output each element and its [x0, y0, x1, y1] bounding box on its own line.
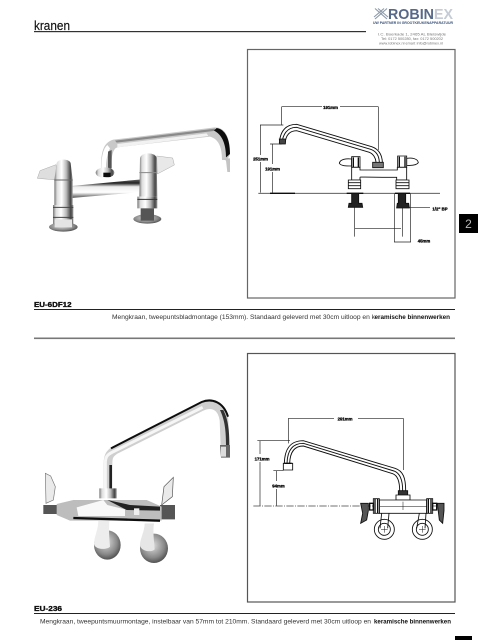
spout — [108, 405, 225, 492]
panel: technical drawing EU-236 — [248, 354, 455, 602]
contact web: www.robinex.nl email: info@robinex.nl — [379, 42, 443, 46]
bridge — [72, 179, 142, 198]
faucet body — [373, 162, 383, 168]
faucet photo EU-236 — [43, 400, 230, 563]
title: kranen — [34, 18, 70, 33]
dimension labels: 94mm — [272, 484, 285, 488]
section number tab: 2 — [465, 217, 472, 231]
dimension labels — [252, 414, 358, 489]
description EU-236: keramische binnenwerken — [374, 618, 451, 626]
dimension labels: 251mm — [253, 156, 268, 162]
model name EU-6DF12: EU-6DF12 — [34, 300, 72, 309]
page number tab — [455, 636, 472, 640]
description EU-6DF12: Mengkraan, tweepuntsbladmontage (153mm). Standaard geleverd met 30cm uitloop en k — [112, 314, 376, 321]
dimension labels: 191mm — [265, 166, 280, 172]
dimension labels: 45mm — [418, 238, 430, 244]
logo tagline: UW PARTNER IN GROOTKEUKENAPPARATUUR — [373, 21, 453, 25]
dimension labels: 291mm — [338, 416, 353, 422]
handles — [45, 473, 55, 503]
logo icon — [374, 8, 388, 19]
right column — [139, 153, 157, 197]
spout — [101, 127, 230, 168]
centre nut — [96, 167, 114, 178]
dimension lines — [257, 418, 403, 506]
logo and contact details — [373, 6, 453, 46]
logo wordmark: ROBINEX — [388, 6, 453, 23]
wall flanges — [94, 530, 121, 560]
right handle — [437, 503, 444, 523]
dimension labels: 1/2" BP — [432, 206, 448, 212]
floor line — [258, 192, 440, 195]
dimension lines — [260, 107, 430, 242]
wall mount legs — [380, 513, 426, 528]
faucet body — [398, 491, 408, 495]
left column — [54, 160, 73, 205]
section number tab — [459, 214, 478, 233]
faucet photo EU-6DF12 — [37, 127, 230, 232]
dimension labels — [250, 103, 448, 244]
handles — [37, 165, 57, 180]
description EU-6DF12: eramische binnenwerken — [374, 314, 450, 321]
contact phone: Tel: 0172 500280, fax: 0172 500202 — [381, 37, 443, 41]
spout outline — [279, 124, 382, 162]
threaded tails — [348, 193, 363, 207]
spout outline — [284, 441, 406, 491]
left handle — [361, 503, 368, 523]
panel: technical drawing EU-6DF12 — [248, 50, 455, 298]
model name EU-236: EU-236 — [34, 604, 62, 613]
body — [57, 500, 162, 521]
contact address: I.C. Boerkade 1, 2465 AL Bleiswijde — [378, 32, 446, 36]
description EU-236: Mengkraan, tweepuntsmuurmontage, instelbaar van 57mm tot 210mm. Standaard geleverd met 30cm uitloop en — [40, 618, 371, 626]
dimension labels: 171mm — [255, 456, 270, 462]
dimension labels: 191mm — [323, 105, 338, 110]
wall line — [253, 505, 443, 507]
